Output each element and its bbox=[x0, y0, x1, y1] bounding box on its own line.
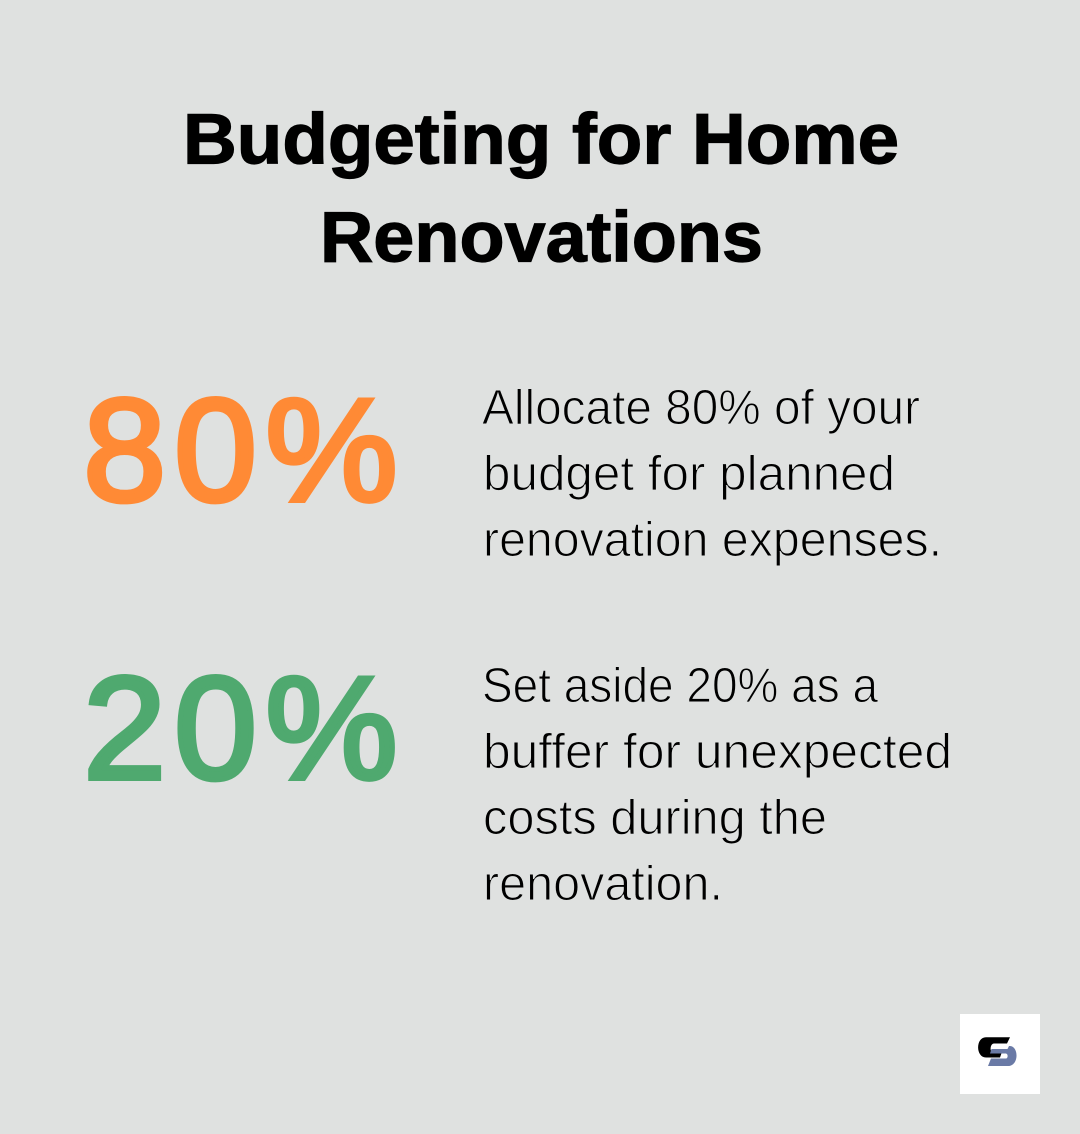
text block: planned expenses: renovation expenses. bbox=[483, 513, 942, 567]
logo badge bbox=[960, 1014, 1040, 1094]
text block: buffer: renovation. bbox=[483, 857, 723, 911]
stat number: 80%: 80% bbox=[83, 370, 398, 532]
text block: buffer bbox=[482, 659, 952, 911]
text block: buffer: Set aside 20% as a bbox=[482, 659, 879, 713]
icon: logo mark bbox=[978, 1037, 1017, 1066]
text block: planned expenses bbox=[482, 381, 942, 567]
stat number: 20%: 20% bbox=[83, 648, 398, 810]
title: Budgeting for Home bbox=[183, 99, 899, 179]
text block: buffer: buffer for unexpected bbox=[483, 725, 952, 779]
title bbox=[183, 99, 899, 277]
title: Renovations bbox=[320, 197, 763, 277]
text block: buffer: costs during the bbox=[483, 791, 827, 845]
stat: 20% buffer bbox=[83, 648, 952, 911]
text block: planned expenses: Allocate 80% of your bbox=[482, 381, 920, 435]
text block: planned expenses: budget for planned bbox=[483, 447, 895, 501]
stat: 80% planned expenses bbox=[83, 370, 942, 567]
